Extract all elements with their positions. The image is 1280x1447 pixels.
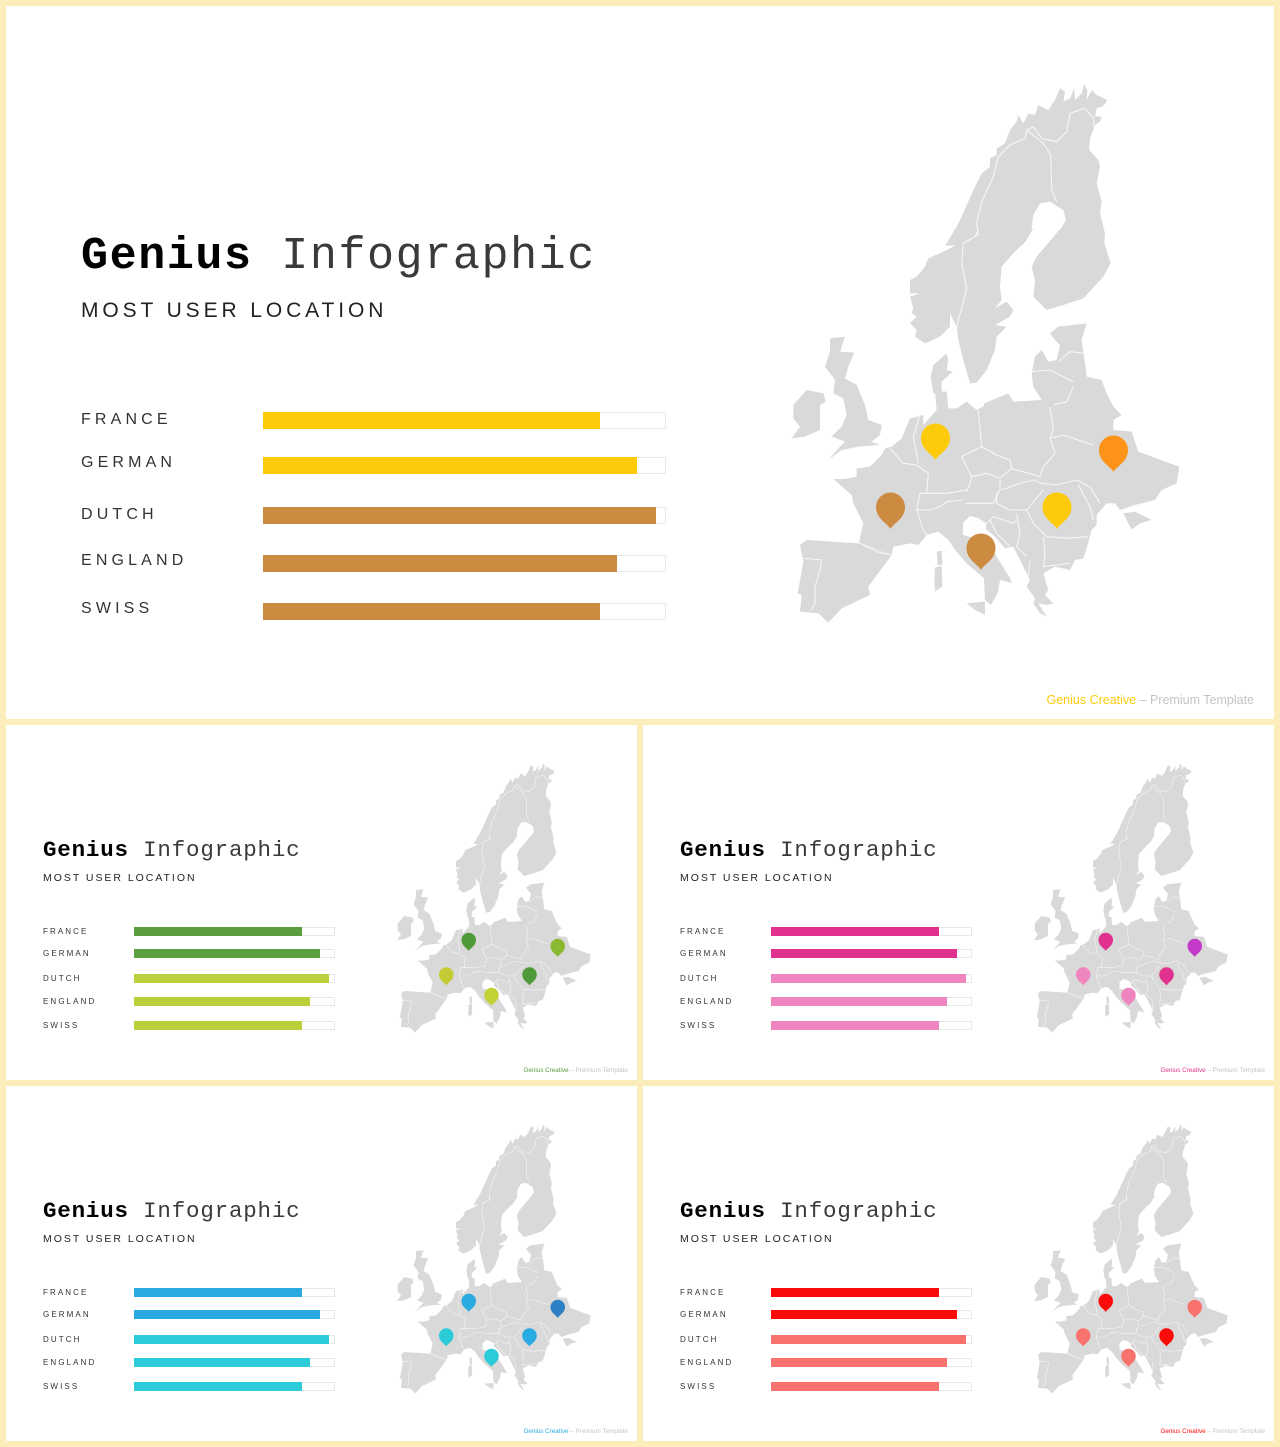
pin: Ukraine bbox=[550, 1300, 564, 1318]
bar: German bbox=[263, 457, 666, 474]
title: Genius Infographic bbox=[680, 837, 937, 863]
label: England: ENGLAND bbox=[43, 997, 96, 1006]
bar: Dutch bbox=[134, 1335, 335, 1344]
pin: France bbox=[438, 967, 453, 986]
pin: Ukraine bbox=[1187, 939, 1202, 957]
map of Europe with pins bbox=[1034, 763, 1228, 1032]
bar: Swiss bbox=[771, 1382, 972, 1391]
label: Swiss: SWISS bbox=[680, 1382, 716, 1391]
title: Genius Infographic bbox=[43, 1198, 300, 1224]
label: Swiss: SWISS bbox=[680, 1021, 716, 1030]
bar: Dutch bbox=[771, 974, 972, 983]
label: England: ENGLAND bbox=[680, 1358, 733, 1367]
panel: blue slide bbox=[6, 1086, 637, 1441]
bar: German bbox=[771, 949, 972, 958]
label: France: FRANCE bbox=[680, 1288, 726, 1297]
bar: Dutch bbox=[134, 974, 335, 983]
label: Dutch: DUTCH bbox=[680, 1335, 718, 1344]
pin: Romania bbox=[1042, 492, 1072, 529]
panel: green slide bbox=[6, 725, 637, 1080]
bar: Swiss bbox=[263, 603, 666, 620]
bar: England bbox=[134, 1358, 335, 1367]
bar: Swiss bbox=[771, 1021, 972, 1030]
pin: Ukraine bbox=[1187, 1300, 1202, 1318]
footer credit: Genius Creative – Premium Template bbox=[1046, 693, 1254, 707]
label: German: GERMAN bbox=[43, 949, 91, 958]
pin: France bbox=[438, 1328, 453, 1346]
label: Swiss: SWISS bbox=[81, 600, 153, 617]
bar: Dutch bbox=[263, 507, 666, 524]
bar: Swiss bbox=[134, 1382, 335, 1391]
map of Europe with pins bbox=[1034, 1124, 1228, 1394]
pin: Italy bbox=[1121, 988, 1135, 1006]
label: German: GERMAN bbox=[680, 1310, 728, 1319]
subtitle: MOST USER LOCATION bbox=[81, 299, 387, 322]
label: France: FRANCE bbox=[680, 927, 726, 936]
label: Dutch: DUTCH bbox=[680, 974, 718, 983]
bar: France bbox=[134, 927, 335, 936]
bar: England bbox=[771, 997, 972, 1006]
pin: Germany bbox=[921, 424, 950, 460]
title: Genius Infographic bbox=[680, 1198, 937, 1224]
pin: Germany bbox=[461, 1294, 476, 1312]
bar: German bbox=[134, 949, 335, 958]
bar: England bbox=[134, 997, 335, 1006]
pin: Romania bbox=[1159, 1328, 1173, 1346]
subtitle: MOST USER LOCATION bbox=[43, 872, 197, 884]
map of Europe with pins bbox=[397, 1124, 590, 1394]
label: England: ENGLAND bbox=[81, 552, 187, 569]
map of Europe with pins bbox=[397, 763, 590, 1032]
bar: France bbox=[134, 1288, 335, 1297]
label: Swiss: SWISS bbox=[43, 1382, 79, 1391]
bar: France bbox=[771, 927, 972, 936]
pin: France bbox=[876, 492, 905, 529]
label: Dutch: DUTCH bbox=[43, 974, 82, 983]
panel: pink slide bbox=[643, 725, 1274, 1080]
bar: German bbox=[771, 1310, 972, 1319]
pin: France bbox=[1076, 967, 1090, 986]
pin: Italy bbox=[966, 534, 996, 570]
pin: Italy bbox=[484, 1349, 498, 1367]
label: Dutch: DUTCH bbox=[81, 506, 158, 523]
pin: Germany bbox=[1098, 933, 1112, 951]
label: German: GERMAN bbox=[81, 454, 176, 471]
subtitle: MOST USER LOCATION bbox=[680, 1232, 834, 1244]
subtitle: MOST USER LOCATION bbox=[43, 1232, 197, 1244]
label: France: FRANCE bbox=[43, 1288, 88, 1297]
footer credit: Genius Creative – Premium Template bbox=[1160, 1428, 1265, 1435]
pin: France bbox=[1076, 1328, 1090, 1346]
label: German: GERMAN bbox=[43, 1310, 91, 1319]
pin: Ukraine bbox=[550, 939, 564, 957]
pin: Romania bbox=[1159, 967, 1173, 986]
label: England: ENGLAND bbox=[43, 1358, 96, 1367]
subtitle: MOST USER LOCATION bbox=[680, 872, 834, 884]
bar: England bbox=[771, 1358, 972, 1367]
pin: Italy bbox=[484, 988, 498, 1006]
label: England: ENGLAND bbox=[680, 997, 733, 1006]
bar: France bbox=[771, 1288, 972, 1297]
pin: Italy bbox=[1121, 1349, 1135, 1367]
label: Swiss: SWISS bbox=[43, 1021, 79, 1030]
label: Dutch: DUTCH bbox=[43, 1335, 82, 1344]
label: France: FRANCE bbox=[81, 411, 172, 428]
title: Genius Infographic bbox=[81, 231, 596, 282]
pin: Germany bbox=[461, 933, 476, 951]
footer credit: Genius Creative – Premium Template bbox=[1160, 1067, 1265, 1074]
bar: Swiss bbox=[134, 1021, 335, 1030]
panel: red slide bbox=[643, 1086, 1274, 1441]
bar: England bbox=[263, 555, 666, 572]
bar: Dutch bbox=[771, 1335, 972, 1344]
footer credit: Genius Creative – Premium Template bbox=[523, 1428, 628, 1435]
footer credit: Genius Creative – Premium Template bbox=[523, 1067, 628, 1074]
label: German: GERMAN bbox=[680, 949, 728, 958]
pin: Ukraine bbox=[1099, 436, 1128, 472]
label: France: FRANCE bbox=[43, 927, 88, 936]
pin: Romania bbox=[522, 1328, 536, 1346]
panel: main yellow slide bbox=[6, 6, 1274, 719]
title: Genius Infographic bbox=[43, 837, 300, 863]
map of Europe with pins bbox=[792, 84, 1179, 622]
pin: Romania bbox=[522, 967, 536, 986]
bar: German bbox=[134, 1310, 335, 1319]
bar: France bbox=[263, 412, 666, 429]
pin: Germany bbox=[1098, 1294, 1112, 1312]
